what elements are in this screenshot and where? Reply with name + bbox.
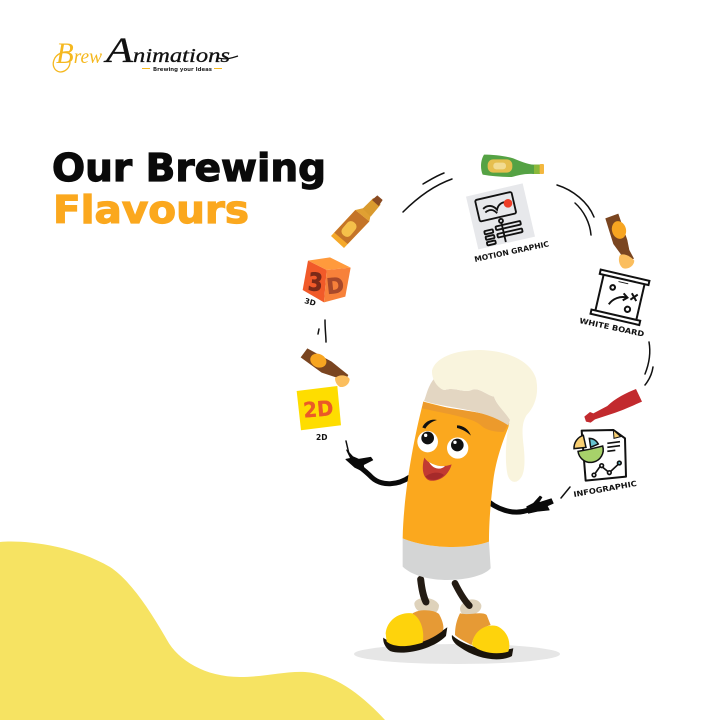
legs xyxy=(421,579,426,602)
yellow background blob xyxy=(0,542,385,720)
icon: 2D card xyxy=(297,386,341,430)
juggling motion arcs xyxy=(318,173,653,498)
orange glass body xyxy=(403,402,510,547)
socks xyxy=(414,598,439,614)
icon: red bottle xyxy=(584,389,642,423)
icon card xyxy=(466,183,535,249)
icon: green bottle xyxy=(481,155,544,177)
ground shadow xyxy=(354,644,560,664)
right arm xyxy=(485,496,553,513)
character: beer mug xyxy=(346,350,553,659)
panel: 3D: 3 xyxy=(307,267,324,297)
eyes xyxy=(417,431,438,452)
left shoe xyxy=(383,627,447,653)
icon: pie chart xyxy=(578,446,603,462)
label: motion graphic: MOTION GRAPHIC xyxy=(474,239,550,264)
right shoe xyxy=(452,635,513,659)
panel: infographic xyxy=(574,430,626,481)
left arm xyxy=(346,450,409,484)
icon: 3D cube xyxy=(308,257,351,270)
title line 2: Flavours xyxy=(53,188,249,233)
mouth xyxy=(423,458,452,481)
icon: amber bottle xyxy=(331,195,383,248)
label: white board: WHITE BOARD xyxy=(579,316,645,339)
label: infographic: INFOGRAPHIC xyxy=(573,479,638,499)
logo: Brew: Brew xyxy=(56,37,103,70)
label: 2D: 2D xyxy=(316,433,327,442)
icon: document xyxy=(582,430,626,481)
grey glass base xyxy=(403,538,491,580)
label: 3D: 3D xyxy=(303,296,317,308)
cream foam xyxy=(432,350,537,482)
title xyxy=(52,146,326,233)
icon: brown bottle upper right xyxy=(605,214,634,269)
logo: Animations: A nimations xyxy=(104,30,230,70)
title line 1: Our Brewing xyxy=(52,146,326,191)
icon: text lines and line chart xyxy=(592,442,621,477)
panel: 3D xyxy=(303,257,351,302)
panel: 2D: 2D xyxy=(302,396,334,423)
panel: white board xyxy=(591,270,649,325)
icon: screen and timeline xyxy=(475,191,524,247)
eyebrows xyxy=(422,420,437,429)
darker beer line xyxy=(422,402,508,432)
icon: board xyxy=(591,270,649,325)
panel: motion graphic xyxy=(466,183,535,249)
logo tagline: Brewing your Ideas xyxy=(153,67,213,73)
icon: brown bottle left xyxy=(301,348,350,387)
panel: 3D: D xyxy=(325,273,345,300)
panel: 2D xyxy=(297,386,341,430)
beige foam xyxy=(424,377,511,425)
logo xyxy=(53,30,238,73)
